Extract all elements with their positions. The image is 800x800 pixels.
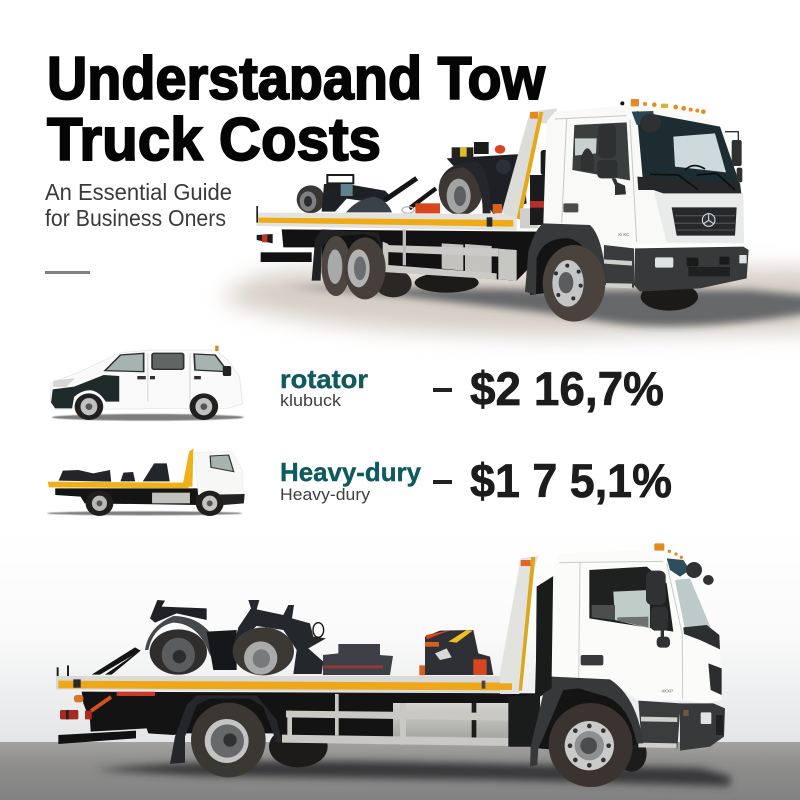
cab body (552, 550, 722, 703)
cab body (543, 105, 744, 248)
centre wheels (415, 273, 479, 293)
machinery behind cab (508, 575, 555, 747)
van windows (105, 353, 228, 372)
badge text: Ki KC (618, 232, 629, 237)
text: subtitle: for Business Oners (45, 205, 226, 231)
row: rotator vehicle icon (50, 346, 244, 421)
headboard (182, 448, 193, 487)
headboard (502, 108, 557, 228)
text: subtitle: An Essential Guide (45, 179, 232, 205)
cargo (59, 463, 170, 482)
text: heavy-duty value: $1 7 5,1% (470, 454, 672, 507)
text: subtitle (45, 179, 232, 231)
rear wheel (191, 703, 266, 777)
wheel arch (530, 677, 643, 767)
heading: title: Understaɒand Tow (47, 45, 545, 112)
door seams (555, 116, 637, 242)
side rails (282, 694, 509, 746)
cargo: toolbox (323, 644, 393, 675)
step (638, 701, 681, 748)
chassis (55, 488, 198, 505)
heading: title: Truck Costs (47, 106, 381, 173)
far tandem wheel (375, 269, 412, 297)
heading: title (47, 45, 545, 173)
roof lights (620, 99, 706, 114)
door handle (581, 655, 603, 665)
road (0, 742, 800, 800)
bottom truck shadow (95, 761, 730, 786)
under-ride bar (261, 252, 312, 262)
cargo: seat unit (419, 630, 493, 675)
tail lights (60, 692, 155, 719)
text: heavy-duty sublabel: Heavy-dury (280, 485, 371, 504)
grille and badge (672, 207, 737, 236)
door seams (559, 561, 683, 699)
flatbed deck (48, 482, 192, 488)
flatbed (256, 206, 517, 231)
machinery behind cab (530, 150, 549, 225)
text: rotator sublabel: klubuck (280, 391, 342, 410)
bottom tow truck rear section (56, 600, 540, 777)
top ground shadow (222, 268, 800, 336)
door handle (563, 203, 578, 212)
wheel well (530, 232, 605, 295)
mirrors (646, 558, 714, 648)
text: rotator label: rotator (280, 364, 368, 394)
text: heavy-duty label: Heavy-dury (280, 457, 422, 487)
wheel well (538, 683, 638, 753)
cargo: rear tractor (145, 600, 237, 675)
far front tyre (617, 735, 647, 772)
far front tyre (641, 283, 698, 311)
dash (433, 388, 452, 392)
windshield (675, 578, 720, 649)
wheels (86, 491, 224, 516)
bumper (634, 247, 749, 292)
cab (194, 452, 243, 495)
cargo: small tractor (297, 175, 440, 213)
front wheel (549, 703, 633, 787)
van roof beacon (215, 346, 219, 351)
badge text: 4XXP (661, 689, 673, 694)
top tow truck rear section (256, 108, 557, 299)
dash (433, 480, 452, 484)
roof beacon and lights (654, 543, 683, 559)
tail light (257, 234, 273, 243)
top tow truck cab (525, 99, 749, 322)
flatbed shadow (47, 511, 242, 515)
step (603, 245, 634, 288)
accent rule (45, 271, 90, 274)
van wheels (75, 393, 218, 420)
windshield (637, 111, 741, 193)
bottom backdrop (0, 530, 800, 742)
side skirt (383, 229, 517, 281)
bumper (680, 703, 725, 751)
door window (589, 567, 673, 632)
van door lines and handles (148, 353, 190, 402)
bottom tow truck cab (500, 543, 725, 787)
van shadow (52, 414, 244, 421)
far rear wheel (269, 726, 328, 767)
van mirror (223, 366, 231, 376)
rear tandem wheels (321, 236, 386, 299)
wheel arch (525, 223, 606, 295)
rear fender (170, 695, 282, 764)
chassis (282, 229, 542, 281)
mirrors (597, 111, 742, 195)
van headlight (53, 378, 75, 387)
row: heavy-duty vehicle icon (47, 448, 245, 516)
side grille (708, 663, 722, 695)
cargo: ladder ramp (92, 647, 141, 675)
under-ride bar (58, 731, 136, 744)
hood panel (654, 192, 744, 243)
fuel tank (393, 703, 509, 738)
door window (572, 122, 630, 180)
headboard (500, 556, 539, 694)
chassis (82, 692, 540, 747)
cargo: front tractor (233, 600, 326, 675)
front wheel (543, 245, 605, 322)
text: rotator value: $2 16,7% (470, 362, 664, 415)
van front dark panel (51, 375, 119, 408)
van body (50, 350, 243, 409)
cargo: large tractor (438, 142, 527, 215)
rear fender (312, 229, 383, 281)
flatbed (56, 665, 518, 693)
